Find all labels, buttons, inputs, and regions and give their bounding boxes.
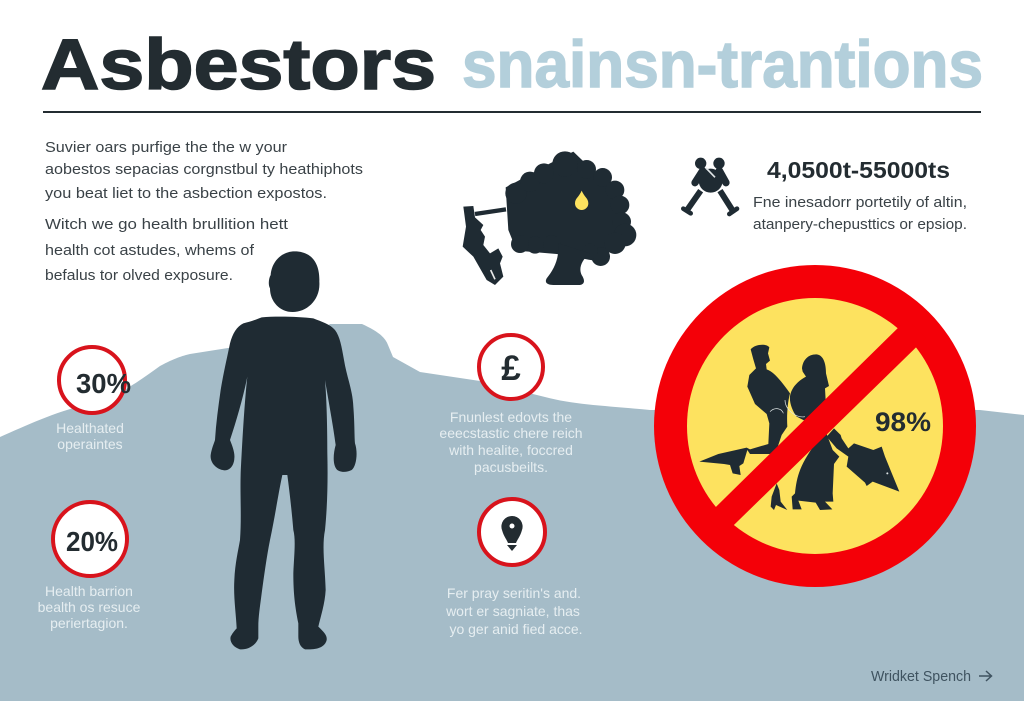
- stat: 20 percent: Health barrion: [45, 583, 133, 599]
- stat: 20 percent: periertagion.: [50, 615, 128, 631]
- title: snainsn-trantions: [462, 27, 983, 101]
- human silhouette: [211, 251, 357, 649]
- intro text: befalus tor olved exposure.: [45, 267, 233, 284]
- stat description: atanpery-chepusttics or epsiop.: [753, 216, 967, 233]
- stat description: Fne inesadorr portetily of altin,: [753, 194, 967, 211]
- background hill: [0, 324, 1024, 701]
- callout: location: [445, 499, 583, 637]
- callout: currency: Fnunlest edovts the: [450, 409, 572, 425]
- intro text: health cot astudes, whems of: [45, 242, 255, 259]
- stat block: exposure range: [683, 157, 967, 233]
- title: Asbestors: [41, 26, 436, 105]
- intro text: you beat liet to the asbection expostos.: [45, 185, 327, 202]
- callout: currency: eeecstastic chere reich: [439, 425, 583, 441]
- icon: tree with tool and yellow drop: [463, 151, 636, 285]
- intro text: [45, 139, 363, 284]
- sign percentage: 98%: [875, 407, 931, 437]
- stat: 20 percent: bealth os resuce: [38, 599, 141, 615]
- stat: 30 percent: [56, 347, 131, 452]
- callout: location: Fer pray seritin's and.: [447, 585, 581, 601]
- intro text: aobestos sepacias corgnstbul ty heathiphots: [45, 161, 363, 178]
- stat: 30 percent: Healthated: [56, 420, 124, 436]
- stat: 20 percent: 20%: [66, 526, 118, 557]
- stat: 20 percent: [38, 502, 141, 631]
- intro text: Suvier oars purfige the the w your: [45, 139, 287, 156]
- stat: 30 percent: 30%: [76, 368, 131, 399]
- footer credit with arrow: Wridket Spench: [871, 669, 971, 685]
- stat: 30 percent: operaintes: [57, 436, 123, 452]
- callout: location: yo ger anid fied acce.: [449, 621, 583, 637]
- icon: two-headed figure: [683, 158, 737, 214]
- callout: currency: [439, 335, 583, 475]
- callout: currency: with healite, foccred: [448, 442, 573, 458]
- callout: currency: £: [501, 349, 521, 388]
- couple silhouette with tools: [699, 345, 899, 510]
- stat number: 4,0500t-55000ts: [767, 157, 950, 183]
- intro text: Witch we go health brullition hett: [45, 216, 289, 233]
- prohibition sign: [654, 265, 976, 587]
- prohibition slash: [706, 319, 926, 534]
- stat description: [753, 194, 967, 233]
- callout: location: wort er sagniate, thas: [445, 603, 580, 619]
- title: [41, 26, 983, 105]
- callout: currency: pacusbeilts.: [474, 459, 548, 475]
